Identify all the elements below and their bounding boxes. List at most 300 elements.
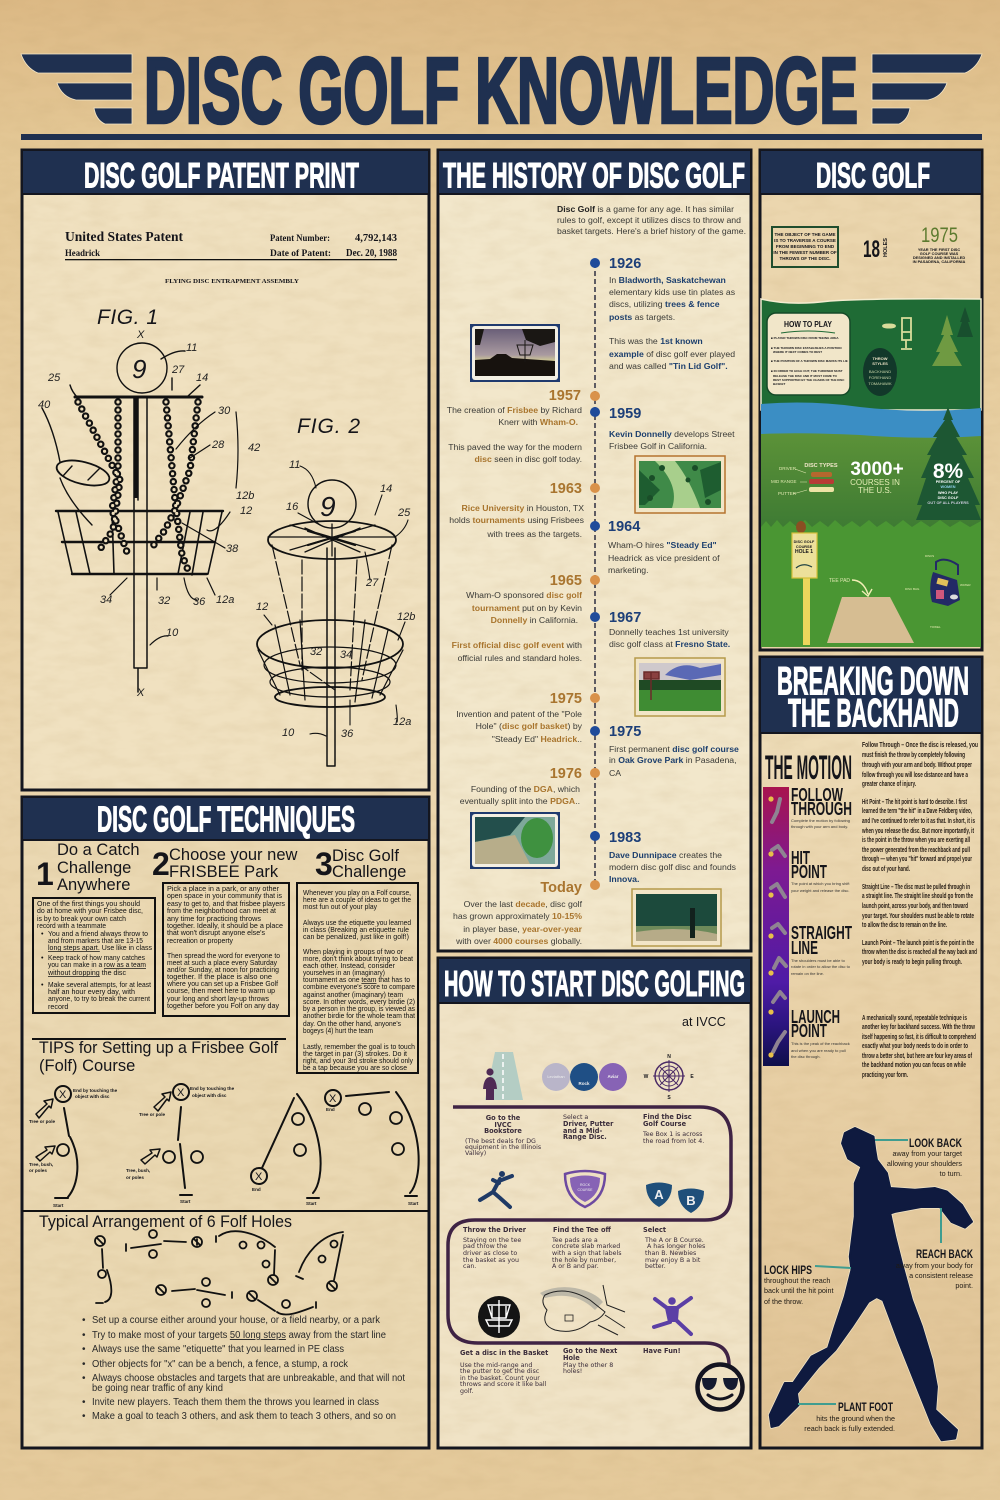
photo: wooded fairway	[470, 812, 560, 869]
how to play card: ■ IN ORDER TO HOLE OUT, THE THROWER MUST	[771, 369, 843, 373]
callout: reach back: REACH BACK	[916, 1249, 974, 1261]
technique 2: meet at such a place every Saturday	[167, 958, 277, 967]
figure 1 basket drawing: 28	[211, 439, 225, 451]
timeline events right: Wham-O hires "Steady Ed"	[608, 540, 717, 550]
stat: courses: COURSES IN	[850, 478, 900, 487]
step 3: Golf Course	[643, 1120, 687, 1128]
technique 3: 3	[315, 846, 333, 882]
heading	[438, 958, 751, 1004]
course tips bullet list: Try to make most of your targets 50 long steps away from the start line	[92, 1330, 386, 1341]
course setup diagrams: Start	[306, 1201, 317, 1206]
timeline events right: This was the 1st known	[609, 336, 703, 346]
technique 3	[297, 846, 418, 1073]
figure 1 basket drawing: 40	[38, 399, 51, 411]
step 6 text	[643, 1226, 705, 1270]
technique 1: do at home with your Frisbee disc,	[37, 906, 143, 915]
figure 1 basket drawing: 38	[226, 543, 239, 555]
step 5 text: the hole by number,	[552, 1257, 616, 1264]
course setup diagrams: X	[177, 1087, 185, 1099]
timeline events left: 1965	[550, 573, 582, 589]
technique 3: Disc Golf	[332, 847, 399, 865]
course tips bullet list: Always use the same "etiquette" that you learned in PE class	[92, 1344, 344, 1355]
technique 2: from the neighborhood can meet at	[167, 906, 276, 915]
throw styles oval: THROW	[872, 356, 888, 361]
disc types: DISC TYPES	[804, 463, 838, 469]
backhand explanation text	[861, 740, 978, 1079]
technique 1: Do a Catch	[57, 841, 140, 859]
step 1: Bookstore	[484, 1127, 522, 1135]
timeline events left: eventually split into the PDGA..	[460, 796, 580, 806]
figure 1 basket drawing: X	[136, 687, 145, 699]
objective box	[772, 227, 838, 267]
course setup diagrams: End	[326, 1107, 335, 1112]
step: hit point: POINT	[791, 862, 827, 882]
stat: courses: THE U.S.	[858, 486, 892, 495]
how to play card: REST SUPPORTED BY THE CHAINS OF THE DISC	[773, 378, 845, 382]
timeline events right: Headrick as vice president of	[608, 553, 720, 563]
icon: a and b shields: A	[654, 1187, 664, 1202]
step 1: equipment in the Illinois	[465, 1144, 541, 1151]
step: straight line: The shoulders must be able to	[791, 958, 846, 963]
technique 2: together. Ideally, it should be a place	[167, 921, 283, 930]
patent header: Date of Patent:	[270, 249, 331, 259]
timeline events left: "Steady Ed" Headrick..	[492, 734, 582, 744]
course setup diagrams: Tree or pole	[29, 1119, 55, 1124]
intro text: rules to golf, except it utilizes discs to throw and	[557, 215, 741, 225]
figure 1 basket drawing: X	[136, 329, 145, 341]
step 5 text: Find the Tee off	[553, 1226, 611, 1234]
technique 3: right, and your 3rd stroke should only	[303, 1056, 413, 1065]
disc types	[771, 463, 838, 496]
icon: disc bag: TOWEL	[930, 625, 941, 629]
timeline events right: marketing.	[608, 565, 649, 575]
how to play card	[767, 313, 850, 395]
hole sign: HOLE 1	[795, 549, 813, 555]
panel: breaking down the backhand: THE MOTION	[765, 749, 852, 787]
step 1: Valley)	[465, 1150, 486, 1157]
timeline events left: has grown approximately 10-15%	[453, 911, 582, 921]
step 4 text: Throw the Driver	[463, 1226, 527, 1234]
callout: plant foot: hits the ground when the	[816, 1414, 895, 1423]
technique 3: most fun out of your play	[303, 902, 377, 911]
patent header: Patent Number:	[270, 234, 330, 244]
step 2: Range Disc.	[563, 1133, 607, 1141]
figure 2 basket drawing: FIG. 2	[297, 415, 360, 438]
objective box: IN THE FEWEST NUMBER OF	[773, 250, 837, 255]
figure 1 basket drawing: 27	[171, 364, 185, 376]
step 1: IVCC	[494, 1121, 512, 1129]
technique 2: any time for practicing throws	[167, 914, 261, 923]
how to play card: WHERE IT NEXT COMES TO REST	[773, 350, 822, 354]
heading	[22, 797, 429, 840]
technique 2: where you can set up a Frisbee Golf	[166, 979, 278, 988]
course tips bullet list: Other objects for "x" can be a bench, a fence, a stump, a rock	[92, 1359, 349, 1370]
step 1: Go to the	[486, 1114, 521, 1122]
how to play card: HOW TO PLAY	[784, 320, 833, 329]
figure 2 basket drawing: 11	[289, 459, 300, 471]
timeline events right: Innova.	[609, 874, 639, 884]
step: follow through	[791, 785, 852, 829]
technique 1: Challenge	[57, 859, 131, 877]
tree stat 8 percent: WHO PLAY	[938, 491, 959, 495]
technique 3: each other. Instead, consider	[303, 961, 396, 970]
icon: disc golf basket badge	[478, 1296, 520, 1338]
step: launch point: This is the peak of the reachback	[791, 1041, 850, 1046]
timeline events right: 1964	[608, 519, 640, 535]
step 6 text: better.	[645, 1263, 666, 1270]
technique 3: tournament as one team that has to	[303, 975, 410, 984]
photo: basket at dusk	[470, 324, 560, 382]
callout: lock hips: throughout the reach	[764, 1276, 830, 1285]
figure 1 basket drawing: 12b	[236, 490, 254, 502]
course setup diagrams: Tree, bush,	[126, 1168, 150, 1173]
step 9 text: Have Fun!	[643, 1347, 681, 1355]
photo: aerial course	[635, 456, 725, 513]
technique 1: and from markers that are 13-15	[48, 936, 143, 945]
step 8 text: Hole	[563, 1354, 580, 1362]
timeline events left: 1957	[549, 388, 581, 404]
step 2	[542, 1063, 627, 1141]
figure 1 basket drawing: 10	[166, 627, 179, 639]
icon: trees	[932, 307, 973, 366]
timeline events right: 1959	[609, 406, 641, 422]
icon: tee shield	[565, 1171, 605, 1207]
technique 2: together. If the place is also one	[167, 972, 272, 981]
timeline events right	[608, 256, 739, 884]
tree stat 8 percent: 8%	[933, 460, 963, 483]
patent header: United States Patent	[65, 230, 183, 245]
course tips bullet list: be going near traffic of any kind	[92, 1383, 223, 1394]
step 7 text: in the basket. Count your	[460, 1375, 540, 1382]
step 4 text: the basket as you	[463, 1257, 519, 1264]
stat: courses	[850, 459, 904, 495]
timeline events right: modern disc golf disc and founds	[609, 862, 737, 872]
tree stat 8 percent: WOMEN	[941, 485, 956, 489]
figure 2 basket drawing: 9	[320, 491, 336, 522]
how to play card: RELEASE THE DISC AND IT MUST COME TO	[773, 374, 838, 378]
stat: 18 holes: 18	[863, 236, 880, 263]
timeline dots	[590, 258, 600, 890]
technique 3: against another (imaginary) team	[303, 990, 403, 999]
callout: lock hips: back until the hit point	[764, 1286, 834, 1295]
course setup diagrams: object with disc	[75, 1094, 110, 1099]
course tips bullet list: •	[82, 1397, 86, 1408]
backhand explanation text: to allow the disc to remain on the line.	[862, 920, 947, 929]
step 3: Find the Disc	[643, 1113, 692, 1121]
icon: sunglasses smiley	[698, 1364, 742, 1410]
panel: how to start	[438, 958, 751, 1448]
panel: disc golf	[760, 150, 982, 650]
icon: jumping person	[654, 1297, 691, 1334]
title rule	[21, 134, 982, 140]
figure 2 basket drawing: 10	[282, 727, 295, 739]
course tips bullet list: •	[82, 1330, 86, 1341]
disc types: PUTTER	[778, 491, 797, 496]
callout: plant foot: PLANT FOOT	[838, 1402, 893, 1414]
callout: lock hips	[764, 1265, 851, 1306]
technique 1: Make several attempts, for at least	[48, 980, 151, 989]
step 7 text	[460, 1349, 548, 1395]
step 3: W	[644, 1074, 649, 1080]
course setup diagrams: Tree, bush,	[29, 1162, 53, 1167]
technique 2: Then spread the word for everyone to	[167, 951, 280, 960]
technique 3: in class (Breaking an etiquette rule	[303, 925, 409, 934]
timeline events right: 1983	[609, 830, 641, 846]
course tips bullet list: Always choose obstacles and targets that are unbreakable, and that will not	[92, 1373, 405, 1384]
step: follow through: THROUGH	[791, 799, 852, 819]
backhand explanation text: practicing your form.	[862, 1070, 908, 1079]
timeline events right: example of disc golf ever played	[609, 349, 735, 359]
step 8 text: holes!	[563, 1368, 582, 1375]
timeline events left: disc seen in disc golf today.	[474, 454, 582, 464]
timeline events left: Donnelly in California.	[491, 615, 578, 625]
course setup diagrams: End by touching the	[73, 1088, 118, 1093]
figure 1 basket drawing: 32	[158, 595, 170, 607]
technique 3: Lastly, remember the goal is to touch	[303, 1042, 415, 1051]
typical arrangement heading: Typical Arrangement of 6 Folf Holes	[39, 1213, 292, 1231]
timeline events left: in player base, year-over-year	[463, 924, 583, 934]
timeline events right: 1975	[609, 724, 641, 740]
technique 1: Keep track of how many catches	[48, 953, 145, 962]
at ivcc: at IVCC	[682, 1015, 726, 1029]
timeline events right: Kevin Donnelly develops Street	[609, 429, 735, 439]
motion strip	[763, 787, 789, 1066]
step 6 text: The A or B Course.	[644, 1237, 704, 1244]
timeline events left	[447, 388, 585, 946]
figure 2 basket drawing: 27	[365, 577, 379, 589]
patent header: 4,792,143	[355, 233, 397, 244]
step: hit point	[791, 848, 850, 893]
step 6 text: than B. Newbies	[645, 1250, 696, 1257]
course tips bullet list: Make a goal to teach 3 others, and ask them to teach 3 others, and so on	[92, 1411, 396, 1422]
step 8 text: Play the other 8	[563, 1362, 613, 1369]
step 2: Select a	[563, 1114, 588, 1121]
callout: look back	[875, 1138, 963, 1178]
technique 2: that won't disrupt anyone else's	[167, 928, 265, 937]
throw styles oval: STYLES	[872, 361, 888, 366]
timeline events left: Founding of the DGA, which	[471, 784, 580, 794]
step 3: Tee Box 1 is across	[642, 1131, 702, 1138]
technique 2: Choose your new	[169, 846, 297, 864]
step 6 text: may enjoy B a bit	[645, 1257, 701, 1264]
timeline events left: The creation of Frisbee by Richard	[447, 405, 582, 415]
figure 2 basket drawing: 12a	[393, 716, 411, 728]
throw styles oval: BACKHAND	[869, 369, 891, 374]
backhand explanation text: disc out of your hand.	[862, 864, 910, 873]
thrower silhouette	[770, 1128, 972, 1440]
technique 1: You and a friend always throw to	[48, 929, 148, 938]
course setup diagrams: X	[59, 1089, 67, 1101]
course setup diagrams: End by touching the	[190, 1086, 235, 1091]
tree stat 8 percent: OUT OF ALL PLAYERS	[927, 501, 969, 505]
heading: DISC GOLF TECHNIQUES	[97, 798, 355, 840]
technique 2: open space in your community that is	[167, 891, 282, 900]
technique 2: your long and short lay-up throws	[167, 994, 269, 1003]
figure 1 basket drawing: 12	[240, 505, 252, 517]
course tips bullet list	[82, 1315, 405, 1422]
step: straight line: remain on the line.	[791, 971, 824, 976]
stat: 1975	[913, 224, 966, 264]
tips heading: TIPS for Setting up a Frisbee Golf	[39, 1039, 278, 1057]
course tips bullet list: •	[82, 1315, 86, 1326]
step: straight line: LINE	[791, 938, 818, 958]
timeline events right: elementary kids use tin plates as	[609, 287, 736, 297]
panel: history timeline	[438, 150, 751, 951]
step 8 text: Go to the Next	[563, 1347, 617, 1355]
technique 1: half an hour every day, with	[48, 987, 135, 996]
step 7 text: golf.	[460, 1388, 473, 1395]
icon: disc bag	[905, 554, 971, 629]
right wing	[872, 54, 982, 124]
step 5 text: with a sign that labels	[552, 1250, 622, 1257]
step 3: N	[667, 1054, 671, 1060]
timeline events left: This paved the way for the modern	[448, 442, 582, 452]
figure 2 basket drawing	[256, 415, 415, 766]
step 6 text: Select	[643, 1226, 666, 1234]
technique 3: Whenever you play on a Folf course,	[303, 888, 411, 897]
figure 2 basket drawing: 14	[380, 483, 392, 495]
step 7 text: throws and score it like ball	[460, 1381, 547, 1388]
figure 1 basket drawing: 25	[47, 372, 61, 384]
heading	[760, 657, 982, 736]
course setup diagrams: X	[329, 1093, 337, 1105]
intro text	[557, 204, 746, 236]
tips heading: (Folf) Course	[39, 1057, 135, 1075]
step 4 text: Staying on the tee	[463, 1237, 521, 1244]
step 6 text: A has longer holes	[647, 1243, 705, 1250]
step 5 text: A or B and par.	[552, 1263, 599, 1270]
course tips bullet list: Invite new players. Teach them them the throws you learned in class	[92, 1397, 379, 1408]
panel: breaking down the backhand	[760, 657, 982, 1448]
technique 1: without dropping the disc	[47, 968, 126, 977]
timeline events right: CA	[609, 768, 621, 778]
objective box: IS TO TRAVERSE A COURSE	[774, 238, 836, 243]
course tips bullet list: •	[82, 1411, 86, 1422]
icon: runner	[480, 1171, 512, 1207]
left wing	[21, 54, 132, 124]
how to play card: ■ THE POSITION OF A THROWN DISC MARKS ITS LIE	[771, 359, 848, 363]
icon: disc bag: DISC BAG	[905, 587, 920, 591]
stat: 1975: IN PASADENA, CALIFORNIA	[913, 259, 966, 264]
technique 3: combine everyone's score to compare	[303, 982, 415, 991]
technique 2: easy to get to, and that frisbee players	[167, 899, 285, 908]
step: follow through: FOLLOW	[791, 785, 843, 805]
title banner	[21, 38, 982, 142]
timeline events left: 1976	[550, 766, 582, 782]
figure 1 basket drawing: 9	[132, 354, 146, 384]
disc types: DRIVER	[779, 466, 797, 471]
course tips bullet list: •	[82, 1344, 86, 1355]
stat: courses: 3000+	[850, 459, 904, 480]
panel: techniques	[22, 797, 429, 1448]
technique 3: When playing in groups of two or	[303, 947, 404, 956]
step 7 text: Use the mid-range and	[460, 1362, 532, 1369]
step: launch point: and when you are ready to pull	[791, 1048, 846, 1053]
step 2: Rock	[578, 1081, 590, 1086]
throw styles oval	[863, 348, 897, 396]
technique 1: record with a teammate	[37, 921, 106, 930]
course setup diagrams: Start	[180, 1199, 191, 1204]
icon: a and b shields	[646, 1182, 704, 1213]
throw styles oval: TOMAHAWK	[868, 381, 892, 386]
timeline events right: discs, utilizing trees & fence	[609, 299, 720, 309]
step: launch point: POINT	[791, 1021, 827, 1041]
objective box: THROWS OF THE DISC.	[780, 256, 830, 261]
course tips bullet list: Set up a course either around your house, or a field nearby, or a park	[92, 1315, 381, 1326]
figure 1 basket drawing	[38, 306, 260, 699]
heading	[438, 150, 751, 196]
technique 3: be a tap because you are so close	[303, 1063, 407, 1072]
technique 3: more, don't think about trying to beat	[303, 954, 413, 963]
step 2: and a Mid-	[563, 1127, 602, 1135]
technique 1	[33, 841, 155, 1013]
timeline events left: Hole" (disc golf basket) by	[476, 721, 583, 731]
technique 1: you can make in a row as a team	[48, 960, 146, 969]
six hole diagram	[95, 1230, 343, 1315]
step 2: Aviar	[607, 1074, 619, 1079]
timeline events left: Invention and patent of the "Pole	[456, 709, 582, 719]
icon: tee shield: COURSE	[578, 1188, 593, 1192]
stat: 1975: YEAR THE FIRST DISC	[918, 247, 960, 252]
timeline events left: Wham-O sponsored disc golf	[466, 590, 582, 600]
timeline events right: Dave Dunnipace creates the	[609, 850, 722, 860]
step 3: S	[667, 1095, 671, 1101]
course setup diagrams: Tree or pole	[139, 1112, 165, 1117]
timeline events left: official rules and standard holes.	[458, 653, 582, 663]
tree stat 8 percent	[916, 407, 981, 520]
icon: disc bag: WATER	[960, 583, 971, 587]
step 2: Driver, Putter	[563, 1120, 614, 1128]
timeline events left: 1963	[550, 481, 582, 497]
figure 1 basket drawing: 34	[100, 594, 112, 606]
heading: HOW TO START DISC GOLFING	[444, 963, 745, 1004]
how to play card: ■ PLAYER THROWS DISC FROM TEEING AREA	[771, 336, 839, 340]
callout: reach back: away from your body for	[896, 1261, 974, 1270]
technique 2: course, then meet here to warm up	[167, 986, 275, 995]
callout: look back: allowing your shoulders	[887, 1159, 962, 1168]
step 4 text: can.	[463, 1263, 476, 1270]
figure 1 basket drawing: FIG. 1	[97, 306, 158, 329]
technique 2	[152, 846, 297, 1016]
heading: DISC GOLF PATENT PRINT	[84, 156, 359, 196]
callout: lock hips: of the throw.	[764, 1297, 803, 1306]
backhand explanation text: greater chance of injury.	[862, 779, 916, 788]
technique 2: together before you Folf on any day	[167, 1001, 279, 1010]
technique 1: One of the first things you should	[37, 899, 140, 908]
timeline events left: with trees as the targets.	[486, 529, 582, 539]
callout: plant foot: reach back is fully extended.	[804, 1424, 895, 1433]
icon: a and b shields: B	[686, 1193, 696, 1208]
technique 3: can be penalized, just like in golf!)	[303, 932, 409, 941]
icon: disc bag: DISCS	[925, 554, 934, 558]
step: hit point: your weight and release the disc.	[791, 888, 849, 893]
step: follow through: through with your arm and body.	[791, 824, 848, 829]
step: follow through: Complete the motion by following	[791, 818, 850, 823]
objective box: THE OBJECT OF THE GAME	[774, 232, 836, 237]
callout: reach back: point.	[955, 1281, 973, 1290]
patent header	[65, 230, 397, 285]
step 3	[642, 1054, 704, 1145]
technique 3: bogeys (4) hurt the team	[303, 1026, 373, 1035]
technique 3: another birdie for the whole team that	[303, 1011, 415, 1020]
timeline events left: holds tournaments using Frisbees	[449, 515, 585, 525]
course setup diagrams	[29, 1084, 419, 1208]
technique 2: Pick a place in a park, or any other	[167, 884, 280, 893]
course setup diagrams: Start	[408, 1201, 419, 1206]
timeline events right: First permanent disc golf course	[609, 744, 739, 754]
technique 3: here are a couple of ideas to get the	[303, 895, 411, 904]
callout: lock hips: LOCK HIPS	[764, 1265, 812, 1277]
